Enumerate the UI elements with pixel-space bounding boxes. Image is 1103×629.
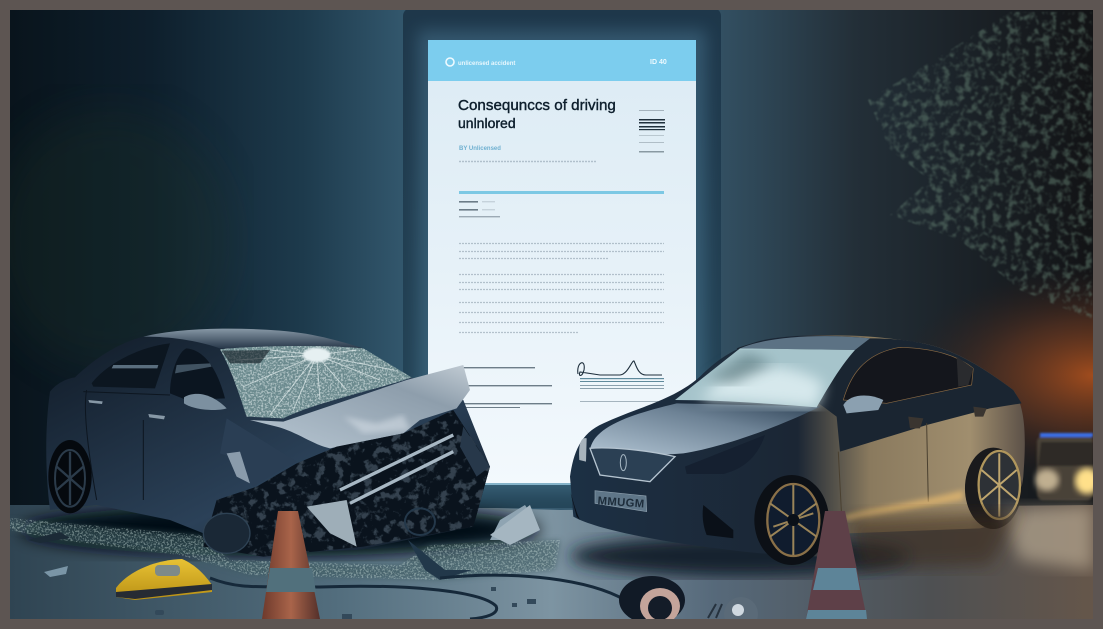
document screen [428,40,696,483]
signature [578,361,664,402]
cracked windshield [675,348,855,407]
document meta lines [639,110,665,152]
body [570,335,1025,557]
cable [210,575,625,619]
short list lines [459,201,500,217]
traffic cone right [806,511,867,619]
light reflection on road [1000,505,1093,570]
signature left lines [460,367,552,408]
police car glow right [1035,433,1099,500]
chrome part [708,597,758,629]
roof [143,329,363,348]
shadow under left car [20,504,540,556]
paragraph lines [459,244,664,332]
road [10,505,1093,619]
document title: unlnlored [458,115,516,131]
door lines [83,390,170,500]
small debris [155,587,536,619]
crumpled fender [220,418,297,487]
door lines [838,423,928,517]
hood [590,403,820,454]
licence plate [595,491,647,512]
windows [843,347,973,403]
grille [590,448,675,482]
wrecked engine [203,410,490,557]
headlight [685,435,765,474]
rear wheel [48,440,92,513]
door handles [88,400,103,404]
body [46,329,490,553]
door handles [908,417,923,428]
document header bar: unlicensed accident [458,61,515,67]
document header bar: ID 40 [650,59,667,66]
document title: Consequnccs of driving [458,97,616,114]
gravel and debris [10,505,560,580]
debris pieces [490,505,540,545]
shattered windshield [220,346,412,418]
mirror [843,395,883,413]
side windows [92,343,170,388]
document title [458,97,616,131]
bent bumper rails [340,435,453,503]
rear wheel [965,448,1022,529]
front wheel [754,475,829,565]
licence plate: MMUGM [597,495,645,511]
light reflection on sill [843,490,963,520]
traffic cone left [262,511,320,619]
yellow device [116,559,212,600]
lower intake [703,505,733,538]
document subtitle: BY Unlicensed [459,146,501,152]
undamaged car right [570,335,1025,565]
loose wheel [619,576,685,624]
foliage right [868,12,1092,320]
dark roof and upper body [737,336,1022,452]
side mirror [184,394,227,410]
crumpled hood [250,365,470,448]
front tyre under wreck [203,513,250,553]
document header bar [428,40,696,81]
tablet [403,8,721,508]
shadow under right car [570,536,910,576]
foliage left [0,110,230,370]
roof highlight [740,336,870,350]
blue divider [459,191,664,194]
wrecked car left [46,329,490,557]
